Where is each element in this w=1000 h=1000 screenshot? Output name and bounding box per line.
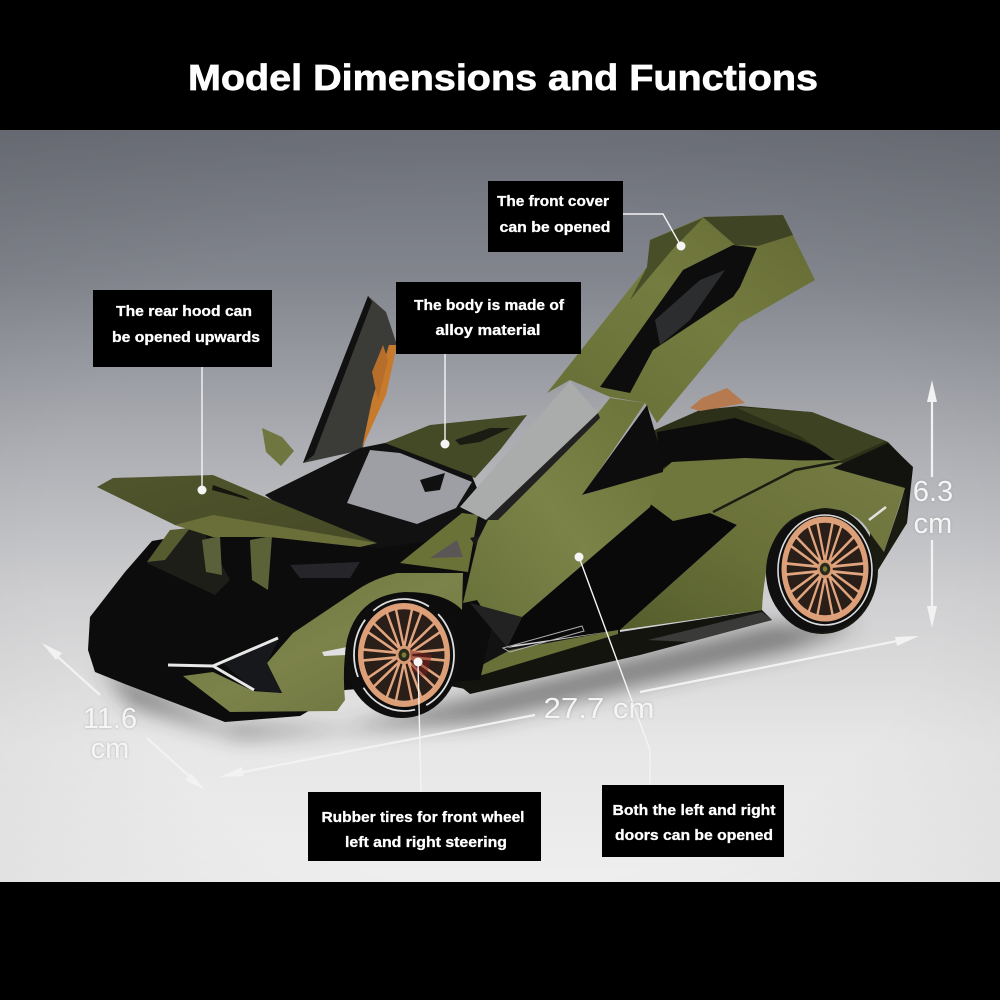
callout: alloy body: The body is made of — [414, 298, 564, 314]
interior mirror — [420, 473, 445, 492]
callout: rear hood: be opened upwards — [112, 330, 260, 346]
engine compartment — [147, 525, 360, 595]
rear wheel arch — [766, 506, 878, 634]
dimension: length — [220, 636, 919, 777]
sian badge — [503, 626, 584, 652]
dimension: height — [913, 380, 953, 628]
dimension: width: cm — [91, 733, 129, 765]
rear body panel — [620, 458, 905, 630]
door glass — [460, 381, 598, 520]
bottom band — [0, 882, 1000, 1000]
headlight lines — [168, 638, 278, 690]
top title band — [0, 0, 1000, 130]
fender marker — [322, 647, 347, 656]
door glass frame — [486, 413, 600, 520]
dimension: height: cm — [914, 508, 952, 540]
rear wheel — [766, 512, 874, 632]
callout: rear hood: The rear hood can — [116, 304, 252, 320]
front under-door black — [440, 590, 620, 690]
rocker green band — [467, 630, 618, 678]
lower sill black — [460, 610, 772, 694]
rear lower dark — [868, 490, 907, 575]
side mirror — [470, 532, 498, 553]
sill highlight strip — [648, 612, 772, 642]
upper door window — [600, 245, 757, 393]
callout: doors: doors can be opened — [615, 828, 773, 844]
callout: rubber tires: Rubber tires for front wheel — [322, 810, 524, 826]
rear deck — [650, 406, 912, 480]
rear upper haunch — [640, 460, 840, 521]
dimension: height: 6.3 — [913, 476, 953, 508]
callout: doors — [574, 552, 784, 857]
callout: front cover: The front cover — [497, 194, 609, 210]
callout: rubber tires: left and right steering — [345, 835, 507, 851]
copper hinge — [690, 388, 745, 411]
lower door panel — [463, 398, 663, 647]
headlight housing — [223, 636, 282, 693]
dimension: width: 11.6 — [83, 703, 137, 735]
door vent window — [582, 405, 663, 495]
hood panel raised — [97, 475, 377, 547]
roof vent — [455, 428, 510, 445]
wing mirror left — [262, 428, 294, 466]
callout: rubber tires — [308, 658, 541, 861]
cockpit black surround — [265, 443, 490, 565]
door wedge dark — [470, 603, 522, 647]
cowl green wedge — [400, 513, 478, 572]
car shadow — [100, 625, 860, 738]
title: Model Dimensions and Functions — [188, 57, 818, 98]
front wheel — [345, 596, 459, 718]
haunch shut line — [713, 462, 838, 512]
model car — [88, 215, 913, 722]
roof — [385, 415, 527, 478]
vent triangle — [430, 540, 463, 558]
photo backdrop — [0, 130, 1000, 882]
callout: alloy body: alloy material — [436, 323, 540, 339]
front fender — [183, 573, 463, 712]
callout: front cover — [488, 181, 686, 252]
front nose black — [88, 530, 500, 722]
callout: rear hood — [93, 290, 272, 494]
callout: alloy body — [396, 282, 581, 448]
dimension: length: 27.7 cm — [544, 693, 654, 725]
callout: doors: Both the left and right — [612, 803, 776, 819]
callout: front cover: can be opened — [500, 220, 610, 236]
rear deck strip — [735, 407, 886, 462]
windshield — [347, 450, 472, 524]
left door raised — [303, 296, 397, 463]
side opening — [507, 500, 737, 648]
rear marker light — [869, 507, 886, 520]
engine bay — [657, 418, 842, 470]
rear end black — [833, 443, 913, 563]
upper wing door — [547, 215, 815, 423]
dimension: width — [42, 643, 205, 790]
